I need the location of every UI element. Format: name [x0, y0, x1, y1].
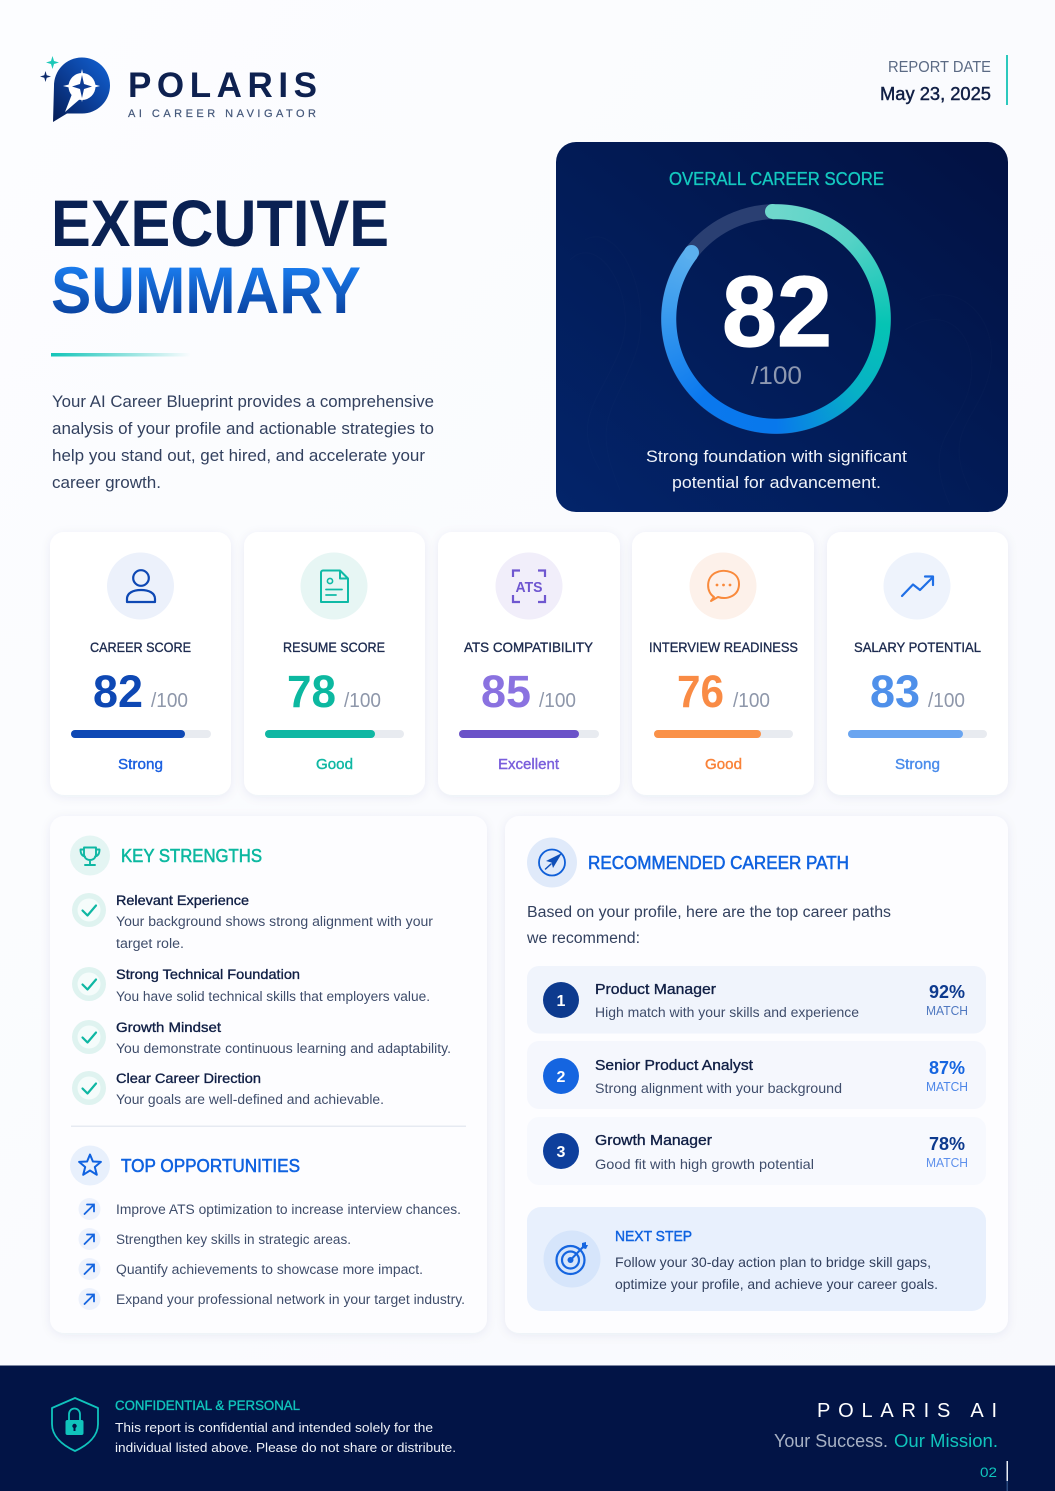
key strengths heading: KEY STRENGTHS: [121, 846, 262, 866]
card: salary potential: 83: [870, 666, 920, 717]
title: SUMMARY: [51, 253, 361, 327]
title: [51, 186, 389, 327]
confidentiality notice: [115, 1398, 456, 1455]
opportunity: ats optimization: Improve ATS optimization to increase interview chances.: [116, 1202, 461, 1217]
career path intro: Based on your profile, here are the top career paths: [527, 904, 891, 921]
wordmark: POLARIS: [128, 66, 317, 105]
top opportunities heading: TOP OPPORTUNITIES: [121, 1156, 300, 1176]
opportunity: quantify achievements: Quantify achievements to showcase more impact.: [116, 1262, 423, 1277]
opportunity: professional network: [78, 1288, 465, 1310]
strength: growth mindset: You demonstrate continuous learning and adaptability.: [116, 1041, 451, 1056]
strength: relevant experience: [72, 892, 434, 951]
card: interview readiness: /100: [733, 690, 770, 712]
footer brand: Our Mission.: [894, 1431, 998, 1451]
strength: growth mindset: Growth Mindset: [116, 1019, 221, 1035]
page number: [980, 1461, 1008, 1491]
path 1: product manager: Product Manager: [595, 981, 716, 998]
strength: career direction: [72, 1070, 384, 1107]
path 3: growth manager: MATCH: [926, 1156, 968, 1170]
strength: growth mindset: [72, 1019, 451, 1056]
icon: ats scan: [496, 552, 562, 620]
strength: career direction: Clear Career Direction: [116, 1070, 261, 1086]
opportunity: key skills: [78, 1228, 351, 1250]
opportunity: professional network: Expand your professional network in your target industry.: [116, 1292, 465, 1307]
opportunity: quantify achievements: [78, 1258, 423, 1280]
caption: [646, 447, 907, 492]
icon: chat bubble: [690, 552, 756, 620]
footer brand: POLARIS AI: [817, 1400, 997, 1422]
card: resume score: RESUME SCORE: [283, 639, 385, 655]
confidentiality notice: individual listed above. Please do not share or distribute.: [115, 1440, 456, 1455]
intro text: Your AI Career Blueprint provides a comprehensive: [52, 392, 434, 411]
panel: overall career score: [556, 142, 1008, 512]
strength: technical foundation: Strong Technical Foundation: [116, 966, 300, 982]
card: ats compatibility: [438, 532, 620, 795]
path 2: senior product analyst: MATCH: [926, 1080, 968, 1094]
report date: May 23, 2025: [880, 84, 991, 104]
path 1: product manager: 1: [556, 993, 566, 1010]
icon: trend arrow: [884, 552, 950, 620]
strength: relevant experience: Your background shows strong alignment with your: [116, 914, 434, 929]
card: resume score: Good: [316, 756, 353, 773]
confidentiality notice: This report is confidential and intended solely for the: [115, 1420, 433, 1435]
panel: recommended career path: [505, 816, 1008, 1333]
card: resume score: /100: [344, 690, 381, 712]
caption: Strong foundation with significant: [646, 447, 907, 466]
card: salary potential: [827, 532, 1008, 795]
callout: next step: Follow your 30-day action plan to bridge skill gaps,: [615, 1254, 931, 1270]
callout: next step: NEXT STEP: [615, 1228, 692, 1245]
card: interview readiness: Good: [705, 756, 742, 773]
strength: technical foundation: [72, 966, 430, 1004]
report date: [880, 55, 1008, 105]
confidentiality notice: CONFIDENTIAL & PERSONAL: [115, 1398, 300, 1413]
card: career score: CAREER SCORE: [90, 639, 191, 655]
career path intro: we recommend:: [526, 930, 640, 947]
card: resume score: 78: [287, 666, 336, 717]
page number: 02: [980, 1464, 997, 1480]
path 1: product manager: 92%: [929, 982, 965, 1002]
intro text: analysis of your profile and actionable strategies to: [52, 419, 434, 438]
heading: OVERALL CAREER SCORE: [669, 169, 884, 189]
callout: next step: optimize your profile, and achieve your career goals.: [615, 1276, 938, 1292]
callout: next step: [527, 1207, 986, 1311]
strength: career direction: Your goals are well-defined and achievable.: [116, 1092, 384, 1107]
card: salary potential: /100: [928, 690, 965, 712]
path 1: product manager: [527, 966, 986, 1034]
path 3: growth manager: 78%: [929, 1134, 965, 1154]
icon: ats scan: ATS: [516, 579, 542, 596]
card: career score: [50, 532, 231, 795]
icon: person: [107, 552, 174, 620]
panel: overall career score: /100: [751, 362, 802, 390]
card: career score: /100: [151, 690, 188, 712]
footer brand: [774, 1400, 998, 1451]
score ring: [661, 204, 891, 434]
icon: shield lock: [52, 1398, 98, 1451]
card: ats compatibility: 85: [481, 666, 531, 717]
intro text: career growth.: [52, 473, 161, 492]
card: interview readiness: 76: [677, 666, 724, 717]
path 3: growth manager: Good fit with high growth potential: [595, 1156, 814, 1172]
path 3: growth manager: [527, 1117, 986, 1185]
career path heading: RECOMMENDED CAREER PATH: [588, 852, 849, 873]
footer brand: Your Success.: [774, 1431, 888, 1451]
career path intro: [526, 904, 891, 947]
card: interview readiness: [632, 532, 814, 795]
panel: strengths and opportunities: [50, 816, 487, 1333]
card: salary potential: Strong: [895, 756, 940, 773]
title: EXECUTIVE: [51, 186, 389, 260]
strength: technical foundation: You have solid technical skills that employers value.: [116, 989, 430, 1004]
path 1: product manager: MATCH: [926, 1004, 968, 1018]
top opportunities heading: [70, 1146, 300, 1186]
caption: potential for advancement.: [672, 473, 881, 492]
card: resume score: [244, 532, 425, 795]
path 2: senior product analyst: 2: [556, 1069, 566, 1086]
path 2: senior product analyst: [527, 1041, 986, 1109]
path 2: senior product analyst: 87%: [929, 1058, 965, 1078]
score number: 82: [722, 256, 832, 368]
footer: [0, 1366, 1055, 1491]
strength: relevant experience: Relevant Experience: [116, 892, 249, 908]
icon: resume document: [300, 552, 368, 620]
career path heading: [527, 838, 849, 888]
key strengths heading: [70, 836, 262, 876]
strength: relevant experience: target role.: [116, 936, 184, 951]
card: interview readiness: INTERVIEW READINESS: [649, 639, 798, 655]
card: career score: Strong: [118, 756, 163, 773]
tagline: AI CAREER NAVIGATOR: [128, 108, 316, 120]
icon: polaris compass pin: [40, 56, 110, 122]
opportunity: ats optimization: [78, 1198, 461, 1220]
intro text: help you stand out, get hired, and accelerate your: [52, 446, 425, 465]
icon: target: [544, 1230, 600, 1288]
path 2: senior product analyst: Senior Product Analyst: [595, 1057, 754, 1074]
header: logo: [40, 56, 317, 122]
card: career score: 82: [93, 666, 143, 717]
opportunity: key skills: Strengthen key skills in strategic areas.: [116, 1232, 351, 1247]
path 3: growth manager: Growth Manager: [595, 1132, 712, 1149]
card: salary potential: SALARY POTENTIAL: [854, 639, 981, 655]
path 3: growth manager: 3: [556, 1144, 566, 1161]
path 2: senior product analyst: Strong alignment with your background: [595, 1080, 842, 1096]
card: ats compatibility: ATS COMPATIBILITY: [464, 639, 594, 655]
path 1: product manager: High match with your skills and experience: [595, 1004, 859, 1020]
card: ats compatibility: /100: [539, 690, 576, 712]
intro text: [52, 392, 434, 492]
card: ats compatibility: Excellent: [498, 756, 560, 773]
report date: REPORT DATE: [888, 59, 991, 76]
